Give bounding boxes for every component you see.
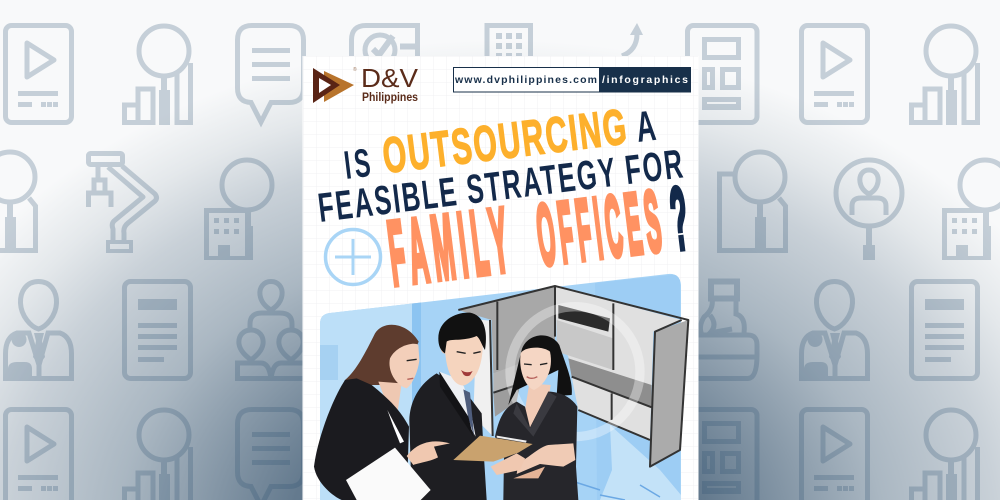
title: FEASIBLE STRATEGY FOR <box>316 141 687 232</box>
icon: magnifier chart <box>912 26 978 125</box>
icon: document <box>124 282 190 378</box>
photo panel: office backdrop <box>320 270 682 500</box>
icon: stamp <box>662 282 757 378</box>
icon: video card <box>6 26 72 122</box>
icon: speech bubble <box>238 26 304 122</box>
icon: magnifier chart <box>124 410 190 500</box>
icon: plus circle <box>326 230 380 284</box>
icon: video card <box>6 410 72 500</box>
icon: logo arrows <box>313 68 354 103</box>
icon: robot arm <box>88 154 156 251</box>
person: man in the centre <box>409 313 525 500</box>
website address bar: www.dvphilippines.com <box>454 74 597 86</box>
website address bar <box>454 67 691 92</box>
icon: businessman <box>802 282 868 381</box>
illustration: office cubicle <box>458 286 688 467</box>
icon: magnifier document <box>0 152 36 251</box>
logo: D&V Philippines: ® <box>353 66 357 73</box>
logo: D&V Philippines <box>313 63 419 104</box>
icon: magnifier building <box>204 160 272 260</box>
icon: office building <box>487 26 530 60</box>
title: ? <box>665 169 693 269</box>
title: OUTSOURCING <box>380 98 631 184</box>
title: FAMILY <box>383 190 519 305</box>
icon: businessman <box>6 282 72 381</box>
logo: D&V Philippines: Philippines <box>362 92 418 104</box>
icon: checklist badge <box>352 26 418 65</box>
clipboard <box>453 436 533 462</box>
icon: magnifier chart <box>912 410 978 500</box>
title <box>316 98 693 305</box>
panel: infographic poster <box>302 56 698 500</box>
icon: magnifier person <box>836 160 902 260</box>
logo: D&V Philippines: D&V <box>361 63 419 93</box>
icon: team <box>238 282 305 378</box>
icon: magnifier document <box>720 152 786 251</box>
icon: magnifier chart <box>124 26 190 125</box>
icon: growth arrow <box>622 23 643 56</box>
website address bar: /infographics <box>602 74 688 86</box>
person: woman on the right <box>495 335 578 500</box>
title: OFFICES <box>532 173 670 284</box>
icon: layout card <box>688 26 757 122</box>
icon: document <box>912 282 978 378</box>
icon: layout card <box>688 410 757 500</box>
title: IS <box>342 139 376 187</box>
person: woman on the left <box>314 325 450 500</box>
icon: magnifier building <box>942 160 1000 260</box>
title: A <box>633 101 658 152</box>
icon: video card <box>802 410 868 500</box>
icon: video card <box>802 26 868 122</box>
icon: speech bubble <box>238 410 304 500</box>
photo: three business people <box>314 313 578 500</box>
